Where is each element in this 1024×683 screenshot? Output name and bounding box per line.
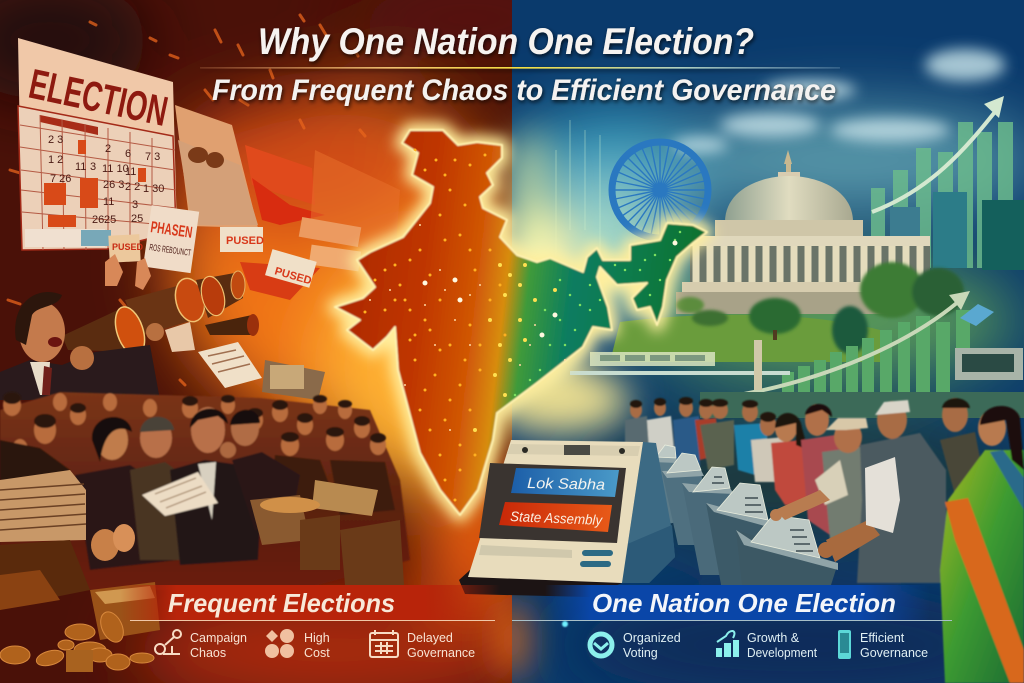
label: campaign chaos: Chaos bbox=[190, 646, 226, 660]
man in cap with grey vest bbox=[857, 400, 946, 583]
button: Lok Sabha bbox=[511, 468, 619, 497]
label: delayed governance: Governance bbox=[407, 646, 475, 660]
calendar poster: 25 bbox=[104, 214, 116, 226]
India map bbox=[335, 130, 707, 515]
button: State Assembly bbox=[499, 502, 612, 532]
chaos crowd bbox=[0, 392, 410, 590]
posters and flags bbox=[175, 105, 400, 300]
calendar poster: 1 30 bbox=[143, 183, 164, 195]
label: efficient governance: Efficient bbox=[860, 631, 905, 645]
label: organized voting: Organized bbox=[623, 631, 681, 645]
heading banner: one nation one election bbox=[545, 585, 930, 620]
calendar poster: 26 3 bbox=[103, 179, 124, 191]
calendar poster: 26 bbox=[92, 214, 104, 226]
row of voting machines bbox=[650, 445, 838, 590]
icon: organized voting bbox=[590, 634, 612, 656]
heading banner: frequent elections: Frequent Elections bbox=[168, 588, 395, 618]
protest signs bbox=[105, 205, 317, 290]
voters queue bbox=[625, 397, 1024, 683]
calendar poster: 7 26 bbox=[50, 173, 71, 185]
calendar poster: 6 bbox=[125, 148, 131, 160]
panel: one nation one election bbox=[512, 585, 952, 660]
title: Why One Nation One Election? bbox=[258, 21, 754, 62]
protest signs: PUSED bbox=[273, 265, 313, 287]
campaigner with megaphone bbox=[0, 292, 164, 400]
calendar poster: 11 bbox=[75, 161, 86, 173]
woman in green saree bbox=[940, 406, 1024, 683]
parliament building bbox=[676, 150, 932, 314]
clouds bbox=[672, 49, 1005, 153]
label: organized voting: Voting bbox=[623, 646, 658, 660]
chakra wheel bbox=[612, 142, 708, 238]
main voting machine bbox=[459, 440, 675, 597]
calendar poster: 25 bbox=[131, 213, 143, 225]
calendar poster: 11 bbox=[103, 196, 114, 208]
man in hat with vest bbox=[815, 418, 880, 540]
road and train band bbox=[570, 340, 1024, 418]
label: efficient governance: Governance bbox=[860, 646, 928, 660]
calendar poster: 11 10 bbox=[102, 163, 129, 175]
calendar poster: 3 bbox=[132, 199, 138, 211]
voter hands on machines bbox=[770, 457, 900, 562]
label: high cost: High bbox=[304, 631, 330, 645]
label: growth and development: Growth & bbox=[747, 631, 800, 645]
lawn and trees bbox=[610, 262, 964, 362]
woman in red bbox=[771, 413, 808, 505]
chart: upper skyline growth bars bbox=[871, 96, 1024, 270]
protest signs: PUSED bbox=[226, 235, 264, 247]
panel: frequent elections bbox=[120, 585, 500, 660]
background: governance side bbox=[510, 0, 1024, 683]
heading banner: frequent elections bbox=[120, 585, 500, 620]
icon: high cost bbox=[265, 629, 294, 658]
heading banner: one nation one election: One Nation One Election bbox=[592, 588, 896, 618]
button: State Assembly: State Assembly bbox=[510, 508, 603, 528]
label: high cost: Cost bbox=[304, 646, 330, 660]
icon: growth and development bbox=[716, 631, 739, 657]
label: delayed governance: Delayed bbox=[407, 631, 453, 645]
calendar poster: 2 bbox=[105, 143, 111, 155]
label: growth and development: Development bbox=[747, 646, 817, 660]
foreground figures bbox=[75, 407, 300, 570]
central glow bbox=[490, 130, 630, 680]
money and paper stacks bbox=[0, 470, 404, 672]
protest signs: PHASEN bbox=[149, 219, 193, 242]
flying papers and document box bbox=[165, 322, 325, 400]
megaphones bbox=[62, 271, 259, 359]
subtitle: From Frequent Chaos to Efficient Governance bbox=[212, 74, 836, 107]
icon: campaign chaos bbox=[155, 630, 181, 654]
background: chaos side bbox=[0, 0, 512, 683]
calendar heading: ELECTION bbox=[25, 60, 172, 135]
calendar poster: 2 2 bbox=[125, 181, 140, 193]
calendar poster: 7 3 bbox=[145, 151, 160, 163]
button: Lok Sabha: Lok Sabha bbox=[527, 475, 605, 494]
calendar poster: 1 2 bbox=[48, 154, 63, 166]
man in dark jacket bbox=[940, 398, 985, 495]
protest signs: ROS REBOUNCT bbox=[149, 242, 192, 258]
label: campaign chaos: Campaign bbox=[190, 631, 247, 645]
man in maroon shirt bbox=[801, 404, 845, 535]
title bbox=[200, 21, 840, 107]
map glow bbox=[335, 130, 707, 515]
calendar poster: 2 3 bbox=[48, 134, 63, 146]
icon: delayed governance bbox=[370, 630, 398, 657]
protest signs: PUSED bbox=[112, 242, 144, 252]
calendar poster: 3 bbox=[90, 161, 96, 173]
calendar poster: 11 bbox=[125, 166, 136, 178]
icon: efficient governance bbox=[838, 630, 851, 659]
calendar poster bbox=[18, 38, 177, 250]
chart: lower growth bars and arrow bbox=[720, 291, 1023, 398]
embers bbox=[8, 15, 365, 385]
